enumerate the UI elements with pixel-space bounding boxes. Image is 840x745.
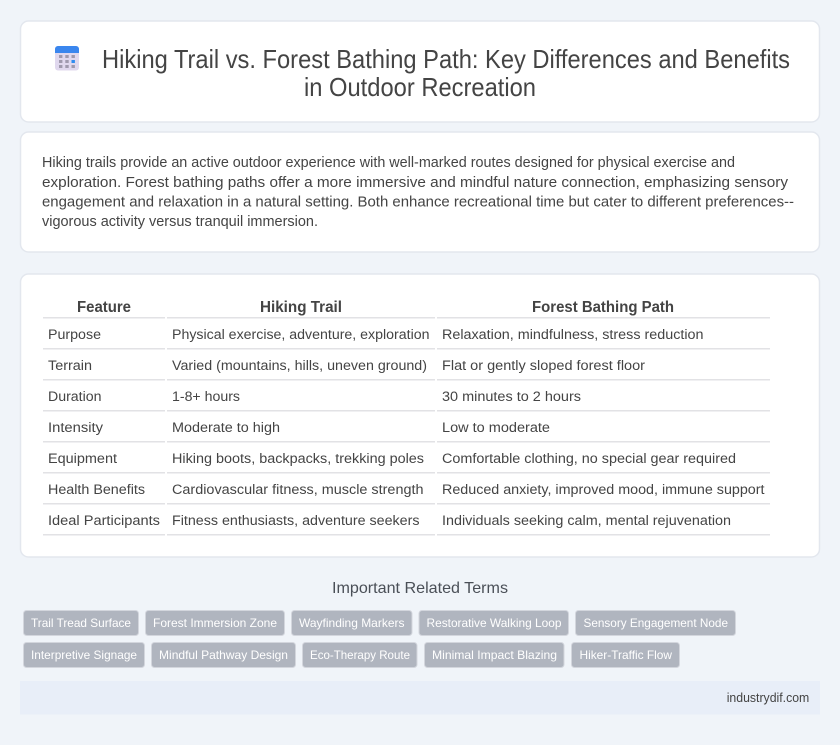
tag: Hiker-Traffic Flow — [580, 648, 672, 662]
footer: industrydif.com — [727, 690, 809, 705]
table row: intensity: Moderate to high — [172, 420, 280, 436]
table row: intensity — [43, 420, 770, 442]
tag: Minimal Impact Blazing — [432, 648, 557, 662]
panel: introduction — [20, 132, 820, 252]
tag — [24, 610, 138, 636]
table row: equipment — [43, 451, 770, 474]
title: Hiking Trail vs. Forest Bathing Path: Key Differences and Benefits — [102, 46, 790, 74]
tag: Trail Tread Surface — [31, 616, 131, 630]
tag: Sensory Engagement Node — [584, 616, 728, 630]
tag — [152, 642, 296, 668]
tag: Restorative Walking Loop — [426, 616, 562, 630]
text block: introduction: engagement and relaxation in a natural setting. Both enhance recreational time but cater to different preferences-- — [42, 194, 794, 210]
table header: Forest Bathing Path — [532, 299, 674, 316]
table row: intensity: Low to moderate — [442, 420, 550, 436]
table row: health benefits: Cardiovascular fitness, muscle strength — [172, 482, 424, 498]
table row: ideal participants: Individuals seeking calm, mental rejuvenation — [442, 513, 731, 529]
panel: title card — [20, 21, 820, 122]
panel: comparison table — [20, 274, 820, 557]
tag — [424, 642, 564, 668]
heading: related terms: Important Related Terms — [332, 580, 508, 597]
tag: Mindful Pathway Design — [159, 648, 288, 662]
tag — [292, 610, 412, 636]
table row: ideal participants: Ideal Participants — [48, 513, 160, 529]
table row: equipment: Comfortable clothing, no special gear required — [442, 451, 736, 467]
table row: equipment: Equipment — [48, 451, 117, 467]
tag: Wayfinding Markers — [299, 616, 404, 630]
table row: health benefits: Reduced anxiety, improved mood, immune support — [442, 482, 765, 498]
tag: Eco-Therapy Route — [310, 648, 410, 662]
tag: Forest Immersion Zone — [153, 616, 277, 630]
tag — [419, 610, 568, 636]
table row: duration: 1-8+ hours — [172, 389, 240, 405]
table row: terrain: Flat or gently sloped forest floor — [442, 358, 645, 374]
text block: introduction: exploration. Forest bathing paths offer a more immersive and mindful nature connection, emphasizing sensory — [42, 175, 789, 191]
tag list: related terms — [24, 610, 736, 668]
table row: health benefits: Health Benefits — [48, 482, 145, 498]
tag — [572, 642, 680, 668]
title: in Outdoor Recreation — [304, 74, 536, 102]
table row: terrain — [43, 358, 770, 380]
table row: terrain: Varied (mountains, hills, uneven ground) — [172, 358, 427, 374]
table header: Feature — [77, 299, 131, 316]
title — [102, 46, 790, 102]
table row: purpose: Relaxation, mindfulness, stress reduction — [442, 327, 704, 343]
tag — [146, 610, 284, 636]
table row: duration: Duration — [48, 389, 102, 405]
footer — [20, 681, 820, 714]
tag — [24, 642, 144, 668]
table row: ideal participants: Fitness enthusiasts, adventure seekers — [172, 513, 420, 529]
text block: introduction: Hiking trails provide an active outdoor experience with well-marked routes designed for physical exercise and — [42, 155, 735, 171]
table row: purpose — [43, 327, 770, 350]
table row: duration: 30 minutes to 2 hours — [442, 389, 581, 405]
text block: introduction — [42, 155, 794, 230]
table header: Hiking Trail — [260, 299, 342, 316]
text block: introduction: vigorous activity versus tranquil immersion. — [42, 214, 318, 230]
table row: health benefits — [43, 482, 770, 504]
tag: Interpretive Signage — [31, 648, 137, 662]
table row: intensity: Intensity — [48, 420, 104, 436]
icon: calendar — [55, 46, 79, 70]
table header — [43, 299, 770, 318]
table row: purpose: Purpose — [48, 327, 101, 343]
table row: purpose: Physical exercise, adventure, exploration — [172, 327, 430, 343]
table row: duration — [43, 389, 770, 412]
table row: equipment: Hiking boots, backpacks, trekking poles — [172, 451, 424, 467]
tag — [576, 610, 736, 636]
tag — [302, 642, 417, 668]
table row: terrain: Terrain — [48, 358, 92, 374]
table row: ideal participants — [43, 513, 770, 536]
